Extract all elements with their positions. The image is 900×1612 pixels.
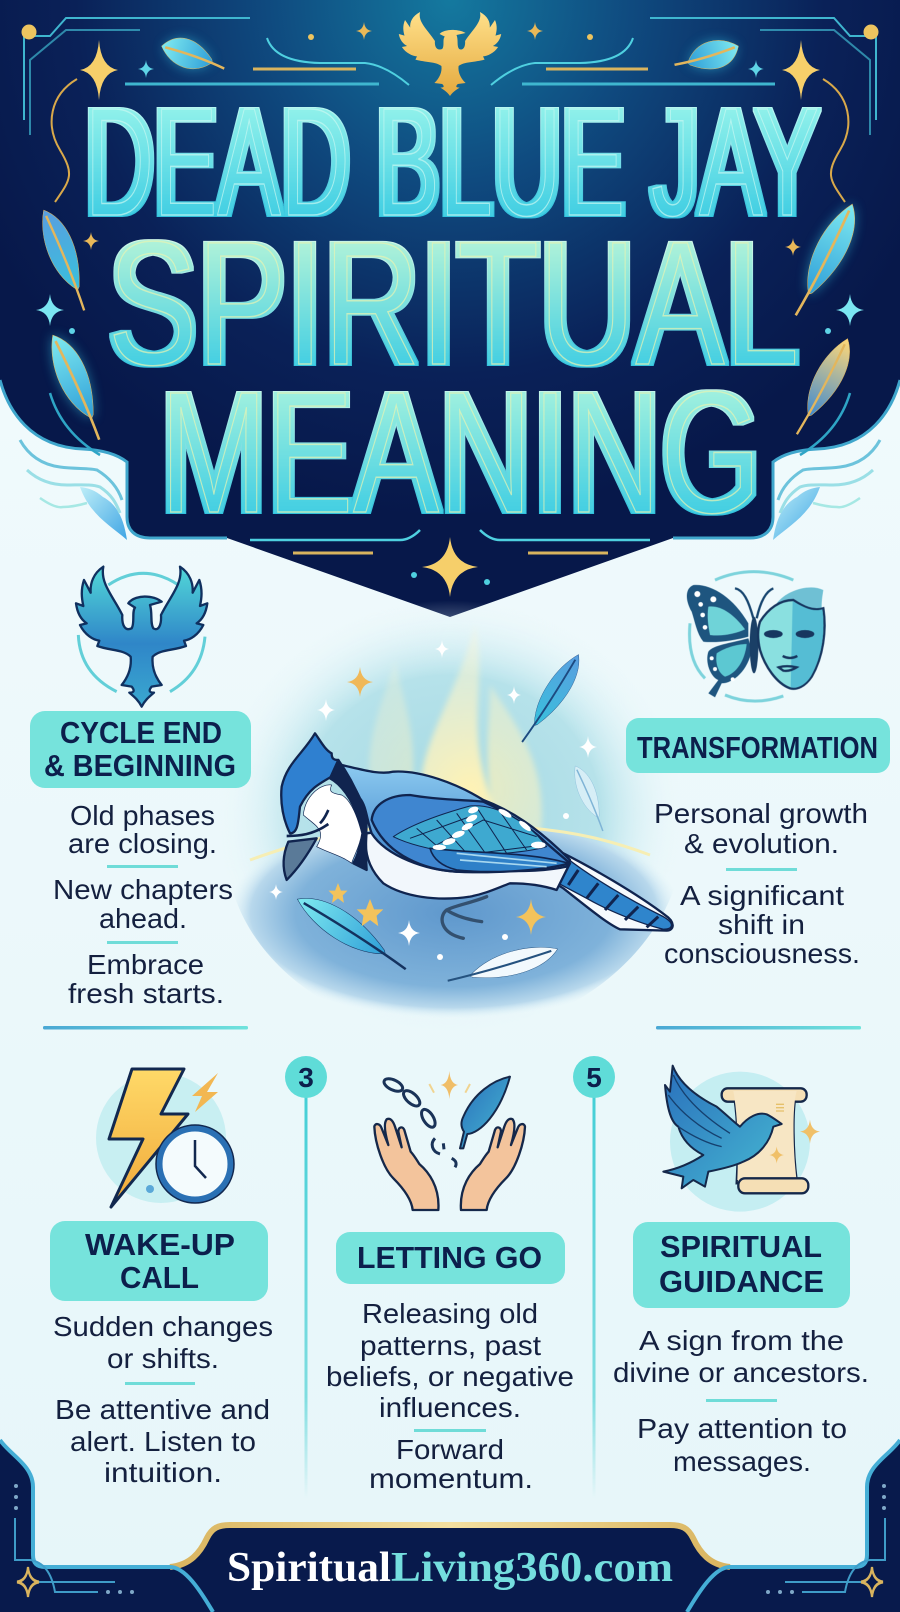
number marker 3 <box>285 1056 327 1498</box>
description text: patterns, past <box>360 1330 541 1361</box>
centre plate <box>170 1525 730 1612</box>
description text: momentum. <box>369 1463 533 1494</box>
drifting feathers <box>290 649 612 994</box>
description text: are closing. <box>68 828 217 859</box>
title <box>85 76 819 549</box>
description text: divine or ancestors. <box>613 1357 869 1388</box>
description text: ahead. <box>99 903 187 934</box>
feathers in banner <box>32 32 866 445</box>
number marker 5: 5 <box>586 1062 602 1093</box>
footer banner: Living360.com <box>391 1545 673 1591</box>
description text: influences. <box>379 1392 521 1423</box>
panel: cycle end and beginning <box>30 567 251 1009</box>
section divider left <box>43 1026 248 1030</box>
panel: wake-up call <box>50 1069 273 1488</box>
description text <box>613 1325 869 1477</box>
description text: Releasing old <box>362 1298 538 1329</box>
icon: gold phoenix crest <box>399 12 501 96</box>
footer banner <box>0 1440 900 1612</box>
banner edge highlight <box>0 380 900 538</box>
icon: banner bottom star <box>411 537 490 597</box>
description text: Sudden changes <box>53 1311 273 1342</box>
description text: Embrace <box>87 949 204 980</box>
number marker 5 <box>573 1056 615 1498</box>
sparkles in banner <box>36 22 864 334</box>
description text <box>53 800 233 1009</box>
panel: letting go <box>326 1071 574 1494</box>
label <box>626 718 890 773</box>
panel: spiritual guidance <box>613 1066 869 1477</box>
description text: Personal growth <box>654 798 868 829</box>
label: CALL <box>120 1260 199 1295</box>
description text: fresh starts. <box>68 978 224 1009</box>
description text: messages. <box>673 1446 811 1477</box>
left wing flourish <box>20 440 127 540</box>
flames <box>369 625 542 840</box>
icon: butterfly and mask <box>687 572 825 701</box>
icon: lightning bolt and clock <box>96 1069 234 1207</box>
label: CYCLE END <box>60 715 222 750</box>
navy collar <box>330 760 367 870</box>
wing <box>372 795 570 872</box>
description text <box>326 1298 574 1494</box>
panel: transformation <box>626 572 890 969</box>
central illustration: dead blue jay <box>218 600 682 1035</box>
label <box>633 1222 850 1308</box>
description text <box>53 1311 273 1488</box>
label: LETTING GO <box>357 1240 542 1275</box>
description text: A significant <box>680 880 844 911</box>
description text: intuition. <box>104 1457 222 1488</box>
label: WAKE-UP <box>85 1227 235 1262</box>
description text: shift in <box>718 909 805 940</box>
description text: New chapters <box>53 874 233 905</box>
corner ornaments <box>14 1484 886 1597</box>
corner frames <box>0 1440 213 1612</box>
body <box>366 820 570 899</box>
gold top edge <box>170 1525 730 1567</box>
description text: consciousness. <box>664 938 860 969</box>
icon: open hands, chain and feather <box>374 1071 525 1210</box>
back <box>342 765 570 872</box>
label: GUIDANCE <box>659 1264 824 1299</box>
description text: Old phases <box>70 800 215 831</box>
white wing bars <box>433 805 546 850</box>
closed eye <box>287 810 328 836</box>
label: & BEGINNING <box>44 748 236 783</box>
label <box>336 1232 565 1284</box>
icon: blue phoenix <box>76 567 207 707</box>
icon: dove and scroll <box>663 1066 820 1212</box>
beak <box>284 838 317 880</box>
right wing flourish <box>773 440 880 540</box>
description text: A sign from the <box>639 1325 844 1356</box>
label <box>50 1221 268 1301</box>
banner ornament lines <box>24 18 876 553</box>
section divider right <box>656 1026 861 1030</box>
description text: Forward <box>396 1434 504 1465</box>
sparkles <box>269 640 597 960</box>
description text: or shifts. <box>107 1343 219 1374</box>
label: SPIRITUAL <box>660 1229 822 1264</box>
crest <box>281 733 343 833</box>
foot <box>442 897 487 938</box>
description text: & evolution. <box>684 828 839 859</box>
flight feathers <box>430 848 568 872</box>
blue edge lines <box>0 1440 900 1612</box>
description text: beliefs, or negative <box>326 1361 574 1392</box>
site name: Spiritual <box>227 1545 391 1591</box>
label <box>30 711 251 788</box>
description text: Pay attention to <box>637 1413 847 1444</box>
bird body <box>281 733 673 938</box>
glow <box>218 600 682 1030</box>
wing scale patch <box>393 806 547 855</box>
number marker 3: 3 <box>298 1062 314 1093</box>
description text: Be attentive and <box>55 1394 270 1425</box>
description text: alert. Listen to <box>70 1426 256 1457</box>
white face <box>303 785 362 863</box>
ground <box>228 825 680 1035</box>
description text <box>654 798 868 969</box>
header banner shield <box>0 0 900 617</box>
tail <box>533 853 673 931</box>
gold corner dots <box>22 24 878 40</box>
